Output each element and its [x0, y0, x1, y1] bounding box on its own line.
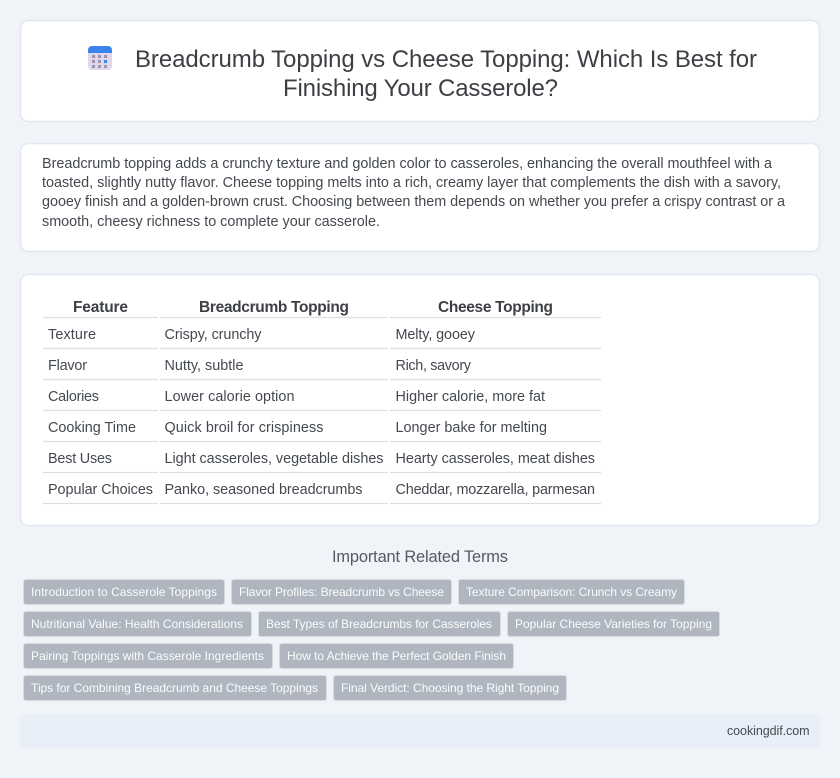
table header: Cheese Topping: [438, 299, 553, 316]
panel: header: [20, 20, 820, 122]
tag row 2: [24, 612, 720, 636]
table header: Feature: [73, 299, 128, 316]
tag row 1: [24, 580, 684, 604]
row: flavor: Flavor: [48, 358, 87, 374]
panel: description: [20, 144, 820, 252]
title: Breadcrumb Topping vs Cheese Topping: Which Is Best for: [135, 46, 757, 73]
row: cooking time: Quick broil for crispiness: [164, 420, 324, 436]
table header: Breadcrumb Topping: [199, 299, 349, 316]
title: [135, 46, 757, 102]
tag row 1: Flavor Profiles: Breadcrumb vs Cheese: [239, 585, 444, 599]
footer: [20, 714, 820, 748]
row: popular choices: [48, 482, 595, 498]
row: texture: Melty, gooey: [396, 327, 476, 343]
row: popular choices: Popular Choices: [48, 482, 153, 498]
row: texture: Crispy, crunchy: [164, 327, 262, 343]
tag row 2: Popular Cheese Varieties for Topping: [515, 617, 712, 631]
title: Finishing Your Casserole?: [283, 75, 558, 102]
row: flavor: [48, 358, 472, 374]
row: cooking time: [48, 420, 547, 436]
row: flavor: Nutty, subtle: [164, 358, 244, 374]
tag row 1: Texture Comparison: Crunch vs Creamy: [466, 585, 677, 599]
related term tags: [24, 580, 720, 700]
row: cooking time: Longer bake for melting: [396, 420, 547, 436]
row: texture: [48, 327, 476, 343]
row: calories: Lower calorie option: [164, 389, 294, 405]
row: cooking time: Cooking Time: [48, 420, 136, 436]
tag row 4: Final Verdict: Choosing the Right Topping: [341, 681, 559, 695]
row: calories: Higher calorie, more fat: [396, 389, 545, 405]
text block: description: [42, 156, 785, 230]
row: best uses: Light casseroles, vegetable dishes: [164, 451, 384, 467]
icon: calendar: [88, 46, 112, 70]
tag row 4: [24, 676, 566, 700]
row: flavor: Rich, savory: [396, 358, 472, 374]
row: calories: Calories: [48, 389, 99, 405]
row: best uses: [48, 451, 595, 467]
panel: comparison table: [20, 274, 820, 526]
tag row 4: Tips for Combining Breadcrumb and Cheese Toppings: [31, 681, 318, 695]
table header: [73, 299, 553, 316]
tag row 2: Best Types of Breadcrumbs for Casseroles: [266, 617, 492, 631]
tag row 2: Nutritional Value: Health Considerations: [31, 617, 243, 631]
text block: description: gooey finish and a golden-brown crust. Choosing between them depends on whether you prefer a crispy contrast or a: [42, 194, 785, 210]
row: calories: [48, 389, 545, 405]
row: texture: Texture: [48, 327, 96, 343]
row: best uses: Hearty casseroles, meat dishes: [396, 451, 595, 467]
row: best uses: Best Uses: [48, 451, 112, 467]
tag row 3: Pairing Toppings with Casserole Ingredients: [31, 649, 264, 663]
text block: description: Breadcrumb topping adds a crunchy texture and golden color to casseroles, enhancing the overall mouthfeel with a: [42, 156, 772, 172]
footer: cookingdif.com: [727, 724, 810, 738]
tag row 3: How to Achieve the Perfect Golden Finish: [287, 649, 506, 663]
row: popular choices: Cheddar, mozzarella, parmesan: [396, 482, 595, 498]
text block: description: toasted, slightly nutty flavor. Cheese topping melts into a rich, creamy layer that complements the dish with a savory,: [42, 175, 781, 191]
tag row 1: Introduction to Casserole Toppings: [31, 585, 217, 599]
text block: description: smooth, cheesy richness to complete your casserole.: [42, 214, 380, 230]
heading: related terms: Important Related Terms: [332, 548, 508, 566]
row: popular choices: Panko, seasoned breadcrumbs: [164, 482, 362, 498]
tag row 3: [24, 644, 514, 668]
